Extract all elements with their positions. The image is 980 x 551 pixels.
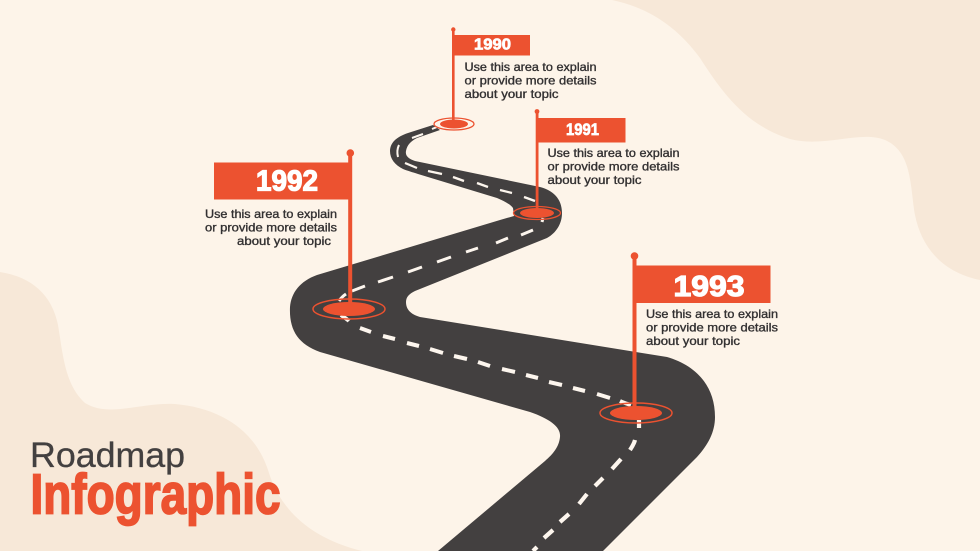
- text: 1991 description: about your topic: [548, 174, 642, 187]
- text: 1992 description: about your topic: [237, 235, 331, 248]
- flag: 1991: [535, 109, 626, 213]
- marker: 1992: [313, 299, 385, 319]
- text: 1990 description: or provide more details: [464, 74, 597, 88]
- flag: 1991: 1991: [566, 121, 599, 139]
- road centre line dashes: [339, 127, 639, 551]
- text: 1992 description: or provide more details: [205, 222, 337, 234]
- background blob: bottom left: [0, 272, 362, 551]
- text: 1992 description: Use this area to explain: [205, 208, 337, 221]
- flag: 1993: [631, 252, 770, 413]
- winding road: [290, 125, 715, 551]
- flag: 1992: [214, 149, 354, 309]
- marker: 1991: [514, 206, 560, 220]
- text: 1992 description: [205, 208, 337, 248]
- text: 1993 description: or provide more details: [646, 322, 778, 334]
- marker: 1993: [600, 403, 672, 423]
- text: 1991 description: Use this area to explain: [548, 147, 680, 160]
- text: 1993 description: about your topic: [646, 335, 740, 348]
- text: 1990 description: Use this area to explain: [464, 61, 596, 74]
- title: Roadmap: [30, 436, 185, 475]
- flag: 1990: 1990: [474, 36, 511, 54]
- flag: 1993: 1993: [674, 271, 744, 303]
- text: 1990 description: about your topic: [464, 88, 559, 101]
- text: 1993 description: [646, 308, 778, 348]
- text: 1993 description: Use this area to explain: [646, 308, 778, 321]
- text: 1991 description: or provide more details: [548, 160, 680, 174]
- background blob: top right: [612, 0, 980, 280]
- marker: 1990: [434, 118, 474, 130]
- text: 1990 description: [464, 61, 597, 101]
- flag: 1992: 1992: [256, 166, 318, 198]
- title: Infographic: [30, 462, 280, 526]
- title: [30, 436, 280, 526]
- text: 1991 description: [548, 147, 680, 187]
- flag: 1990: [451, 27, 530, 124]
